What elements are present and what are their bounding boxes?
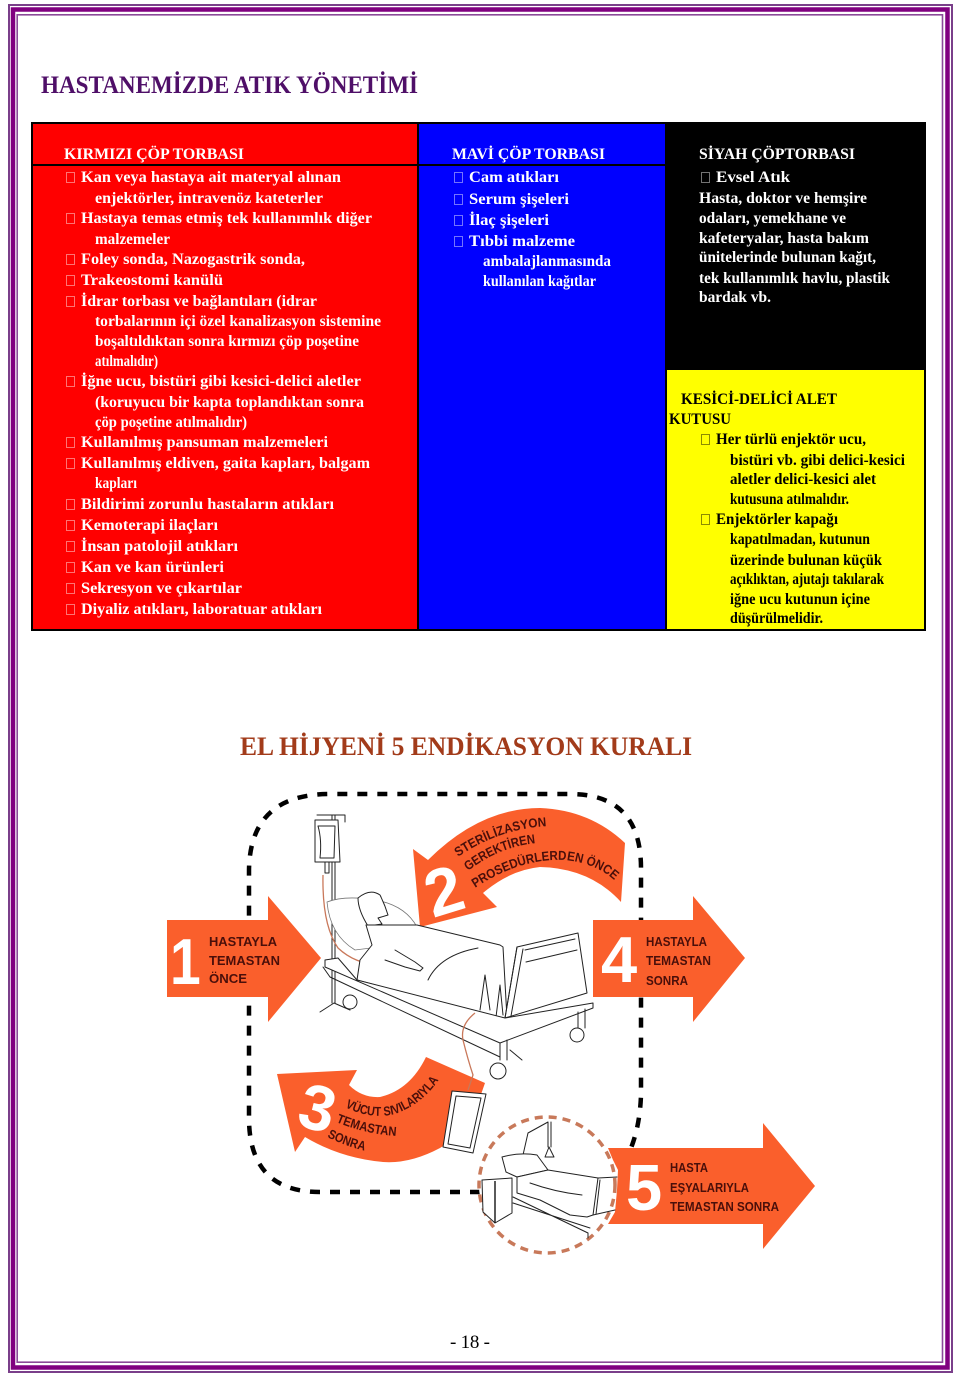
illustration: five moments of hand hygiene <box>167 792 815 1255</box>
arrow 1: HASTAYLA <box>209 934 278 949</box>
arrow 4: 4 <box>601 923 637 996</box>
panel: sharps box <box>669 391 906 627</box>
arrow 2: PROSEDÜRLERDEN ÖNCE <box>471 850 620 888</box>
text block: blue bag list: Serum şişeleri <box>469 191 570 208</box>
text block: black bag list: Evsel Atık <box>716 169 790 186</box>
text block: red bag list: enjektörler, intravenöz kateterler <box>95 190 323 207</box>
panel: black bag <box>699 146 890 306</box>
text block: red bag list: Bildirimi zorunlu hastaların atıkları <box>81 496 335 513</box>
text block: red bag list: Foley sonda, Nazogastrik sonda, <box>81 251 305 268</box>
heading: hand hygiene: EL HİJYENİ 5 ENDİKASYON KURALI <box>240 731 692 761</box>
text block: sharps box list <box>702 431 906 627</box>
arrow 4: TEMASTAN <box>646 953 711 968</box>
text block: red bag list: Hastaya temas etmiş tek kullanımlık diğer <box>81 210 372 227</box>
title: HASTANEMİZDE ATIK YÖNETİMİ <box>41 71 418 99</box>
text block: sharps box list: kutusuna atılmalıdır. <box>730 491 849 508</box>
text block: red bag list: Kullanılmış pansuman malzemeleri <box>81 434 329 451</box>
text block: red bag list: Kullanılmış eldiven, gaita kapları, balgam <box>81 455 370 472</box>
text block: sharps box list: aletler delici-kesici alet <box>730 471 877 488</box>
text block: black bag list: kafeteryalar, hasta bakım <box>699 230 869 247</box>
arrow 5: TEMASTAN SONRA <box>670 1199 780 1214</box>
text block: black bag list <box>699 169 890 306</box>
arrow 5: 5 <box>626 1151 662 1224</box>
arrow 2: GEREKTİREN <box>464 834 535 870</box>
text block: sharps box list: bistüri vb. gibi delici-kesici <box>730 452 906 469</box>
arrow 1 <box>167 896 321 1022</box>
text block: blue bag list: Tıbbi malzeme <box>469 233 575 250</box>
panel: blue bag <box>452 146 611 290</box>
text block: red bag list: malzemeler <box>95 231 170 248</box>
text block: red bag list: (koruyucu bir kapta toplandıktan sonra <box>95 394 364 411</box>
arrow 3: SONRA <box>328 1130 364 1151</box>
text block: blue bag list: İlaç şişeleri <box>469 212 550 229</box>
text block: red bag list: boşaltıldıktan sonra kırmızı çöp poşetine <box>95 333 359 350</box>
text block: red bag list: Kemoterapi ilaçları <box>81 517 219 534</box>
heading: sharps box: KUTUSU <box>669 411 731 428</box>
page number: - 18 - <box>450 1332 490 1353</box>
patient surroundings dashed circle <box>479 1117 615 1253</box>
arrow 3: TEMASTAN <box>338 1114 396 1136</box>
text block: sharps box list: kapatılmadan, kutunun <box>730 531 870 548</box>
text block: blue bag list: Cam atıkları <box>469 169 560 186</box>
text block: blue bag list <box>454 169 611 290</box>
text block: black bag list: odaları, yemekhane ve <box>699 210 846 227</box>
text block: red bag list: Diyaliz atıkları, laboratuar atıkları <box>81 601 323 618</box>
text block: sharps box list: üzerinde bulunan küçük <box>730 552 882 569</box>
arrow 5: HASTA <box>670 1160 709 1175</box>
arrow 4 <box>593 896 745 1022</box>
heading: sharps box <box>669 391 838 428</box>
text block: red bag list: torbalarının içi özel kanalizasyon sistemine <box>95 313 381 330</box>
text block: red bag list: İğne ucu, bistüri gibi kesici-delici aletler <box>81 373 361 390</box>
panel: red bag <box>64 146 381 618</box>
text block: red bag list: Sekresyon ve çıkartılar <box>81 580 242 597</box>
arrow 1: 1 <box>170 925 201 998</box>
text block: red bag list: kapları <box>95 475 138 492</box>
arrow 3: 3 <box>292 1069 344 1147</box>
arrow 1: TEMASTAN <box>209 953 280 968</box>
arrow 4: SONRA <box>646 973 689 988</box>
text block: black bag list: bardak vb. <box>699 289 771 306</box>
arrow 2: 2 <box>415 850 472 931</box>
heading: red bag: KIRMIZI ÇÖP TORBASI <box>64 146 244 163</box>
text block: red bag list: İnsan patolojil atıkları <box>81 538 239 555</box>
text block: red bag list: çöp poşetine atılmalıdır) <box>95 414 247 431</box>
text block: sharps box list: Enjektörler kapağı <box>716 511 839 528</box>
text block: red bag list: atılmalıdır) <box>95 353 158 370</box>
text block: red bag list: İdrar torbası ve bağlantıları (idrar <box>81 293 317 310</box>
text block: black bag list: Hasta, doktor ve hemşire <box>699 190 867 207</box>
text block: sharps box list: açıklıktan, ajutajı takılarak <box>730 571 884 588</box>
arrow 1: ÖNCE <box>209 971 247 986</box>
arrow 2 <box>413 808 625 931</box>
text block: black bag list: tek kullanımlık havlu, plastik <box>699 270 890 287</box>
text block: black bag list: ünitelerinde bulunan kağıt, <box>699 249 876 266</box>
text block: sharps box list: iğne ucu kutunun içine <box>730 591 870 608</box>
icon: empty bed and nightstand <box>482 1122 617 1238</box>
text block: sharps box list: Her türlü enjektör ucu, <box>716 431 866 448</box>
arrow 3 <box>277 1057 485 1162</box>
heading: blue bag: MAVİ ÇÖP TORBASI <box>452 146 605 163</box>
text block: red bag list <box>66 169 381 618</box>
text block: red bag list: Trakeostomi kanülü <box>81 272 223 289</box>
text block: blue bag list: ambalajlanmasında <box>483 253 611 270</box>
text block: blue bag list: kullanılan kağıtlar <box>483 273 596 290</box>
panel: waste table background <box>31 122 926 631</box>
text block: sharps box list: düşürülmelidir. <box>730 610 823 627</box>
arrow 3: VÜCUT SIVILARIYLA <box>348 1077 438 1116</box>
arrow 5 <box>608 1123 815 1249</box>
patient zone dashed outline <box>249 794 641 1192</box>
arrow 5: EŞYALARIYLA <box>670 1180 750 1195</box>
text block: red bag list: Kan veya hastaya ait materyal alınan <box>81 169 341 186</box>
arrow 2: STERİLİZASYON <box>454 817 546 856</box>
arrow 4: HASTAYLA <box>646 934 708 949</box>
text block: red bag list: Kan ve kan ürünleri <box>81 559 225 576</box>
icon: hospital bed with patient <box>315 815 593 1079</box>
icon: urine bag and tube <box>443 1013 486 1153</box>
heading: black bag: SİYAH ÇÖPTORBASI <box>699 146 855 163</box>
heading: sharps box: KESİCİ-DELİCİ ALET <box>681 391 838 408</box>
